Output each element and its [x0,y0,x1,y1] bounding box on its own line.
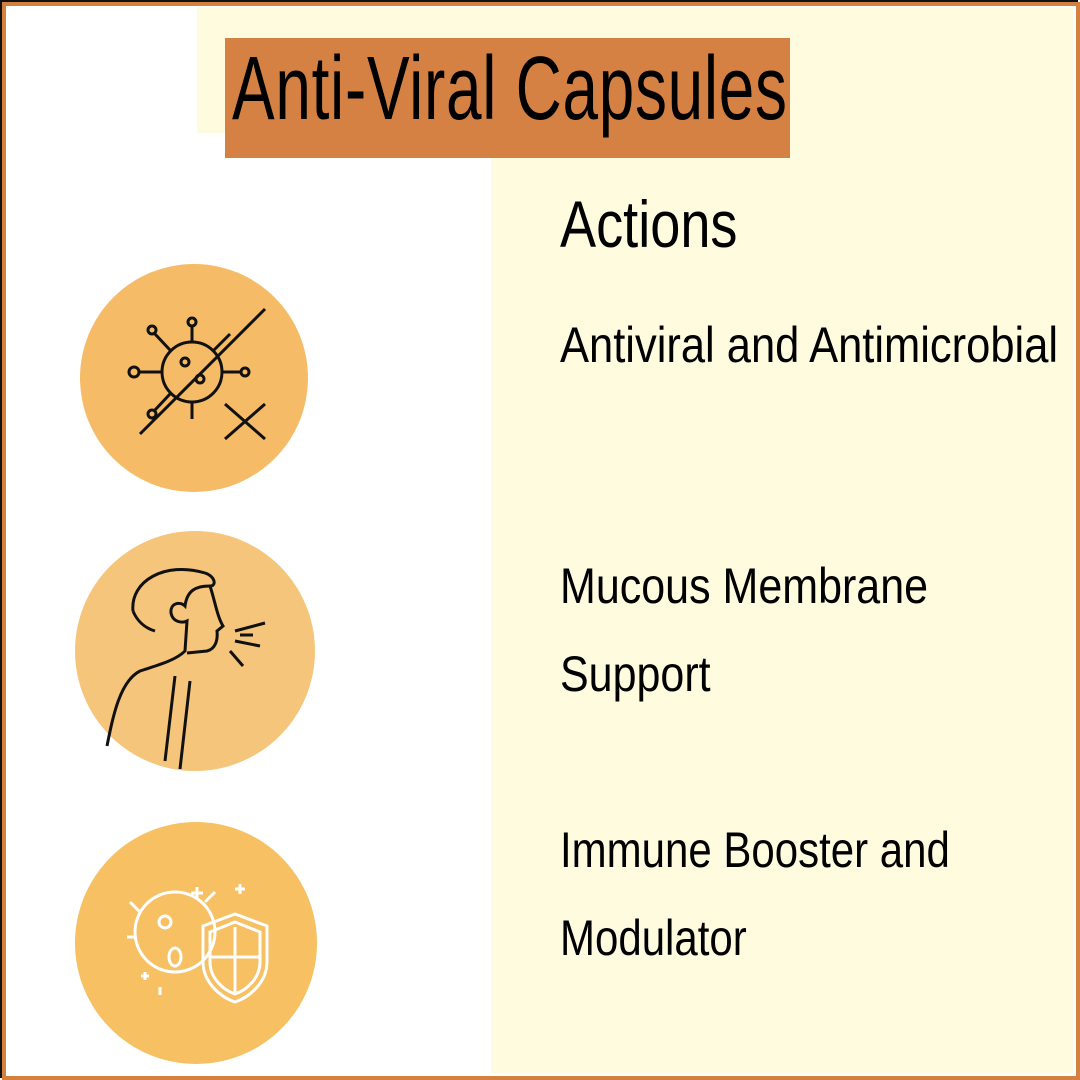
text: action 1: Antiviral and Antimicrobial [560,317,1058,373]
text: action 2 [560,558,928,702]
text: action 2: Mucous Membrane [560,558,928,614]
text: action 2: Support [560,646,711,702]
icon: person coughing [75,531,315,771]
text: action 3: Modulator [560,910,747,966]
text: action 3 [560,822,950,966]
icon: virus with shield [75,822,317,1064]
cream background right [491,7,1073,1073]
title banner: Anti-Viral Capsules [232,39,788,139]
cream background top [197,7,1073,133]
text: action 3: Immune Booster and [560,822,950,878]
icon: virus crossed [80,264,308,492]
heading: Actions: Actions [560,187,737,261]
